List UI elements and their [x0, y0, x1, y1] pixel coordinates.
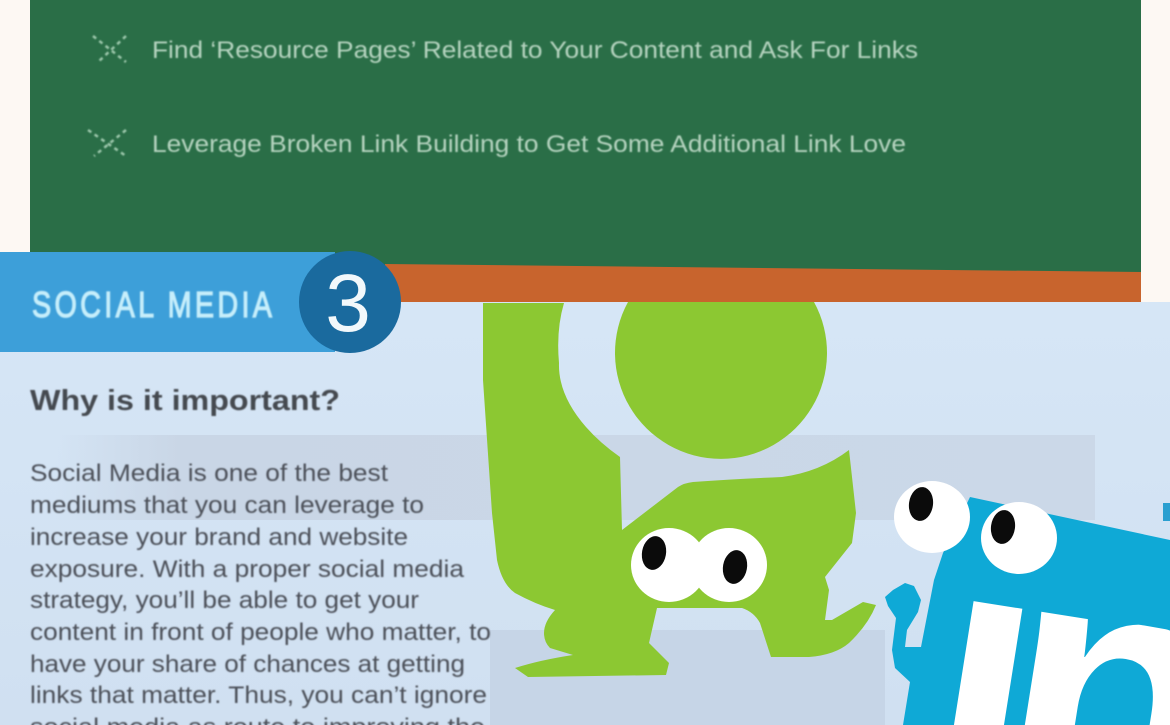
monster body: [483, 303, 876, 677]
linkedin eyes: [894, 481, 1057, 574]
panel: green link building section: [30, 0, 1141, 272]
badge number: 3: [325, 258, 371, 349]
body text: links that matter. Thus, you can’t ignore: [30, 682, 487, 709]
bullet text 2: Leverage Broken Link Building to Get Some Additional Link Love: [152, 131, 906, 158]
linkedin character: [885, 464, 1170, 725]
panel: social media section background: [0, 302, 1170, 725]
body text: content in front of people who matter, to: [30, 619, 491, 646]
heading: Why is it important?: [30, 385, 340, 417]
banner ribbon: [0, 252, 335, 352]
banner title: SOCIAL MEDIA: [32, 284, 272, 325]
number badge: [299, 251, 401, 353]
body text: exposure. With a proper social media: [30, 556, 465, 583]
section banner: [0, 251, 401, 353]
body text: have your share of chances at getting: [30, 651, 465, 678]
body text: [30, 460, 491, 725]
body text: strategy, you’ll be able to get your: [30, 587, 419, 614]
body text: mediums that you can leverage to: [30, 492, 424, 519]
bullet text 1: Find ‘Resource Pages’ Related to Your Content and Ask For Links: [152, 37, 918, 64]
icon: star bullet 2: [88, 130, 126, 156]
body text: increase your brand and website: [30, 524, 408, 551]
monster head circle: [615, 302, 827, 459]
neighbouring blue dot: [1163, 503, 1170, 521]
monster eyes: [631, 528, 767, 602]
orange divider bar: [385, 264, 1141, 302]
linkedin body: [885, 497, 1170, 725]
green monster character: [483, 302, 876, 677]
body text: Social Media is one of the best: [30, 460, 388, 487]
icon: star bullet 1: [93, 36, 126, 62]
